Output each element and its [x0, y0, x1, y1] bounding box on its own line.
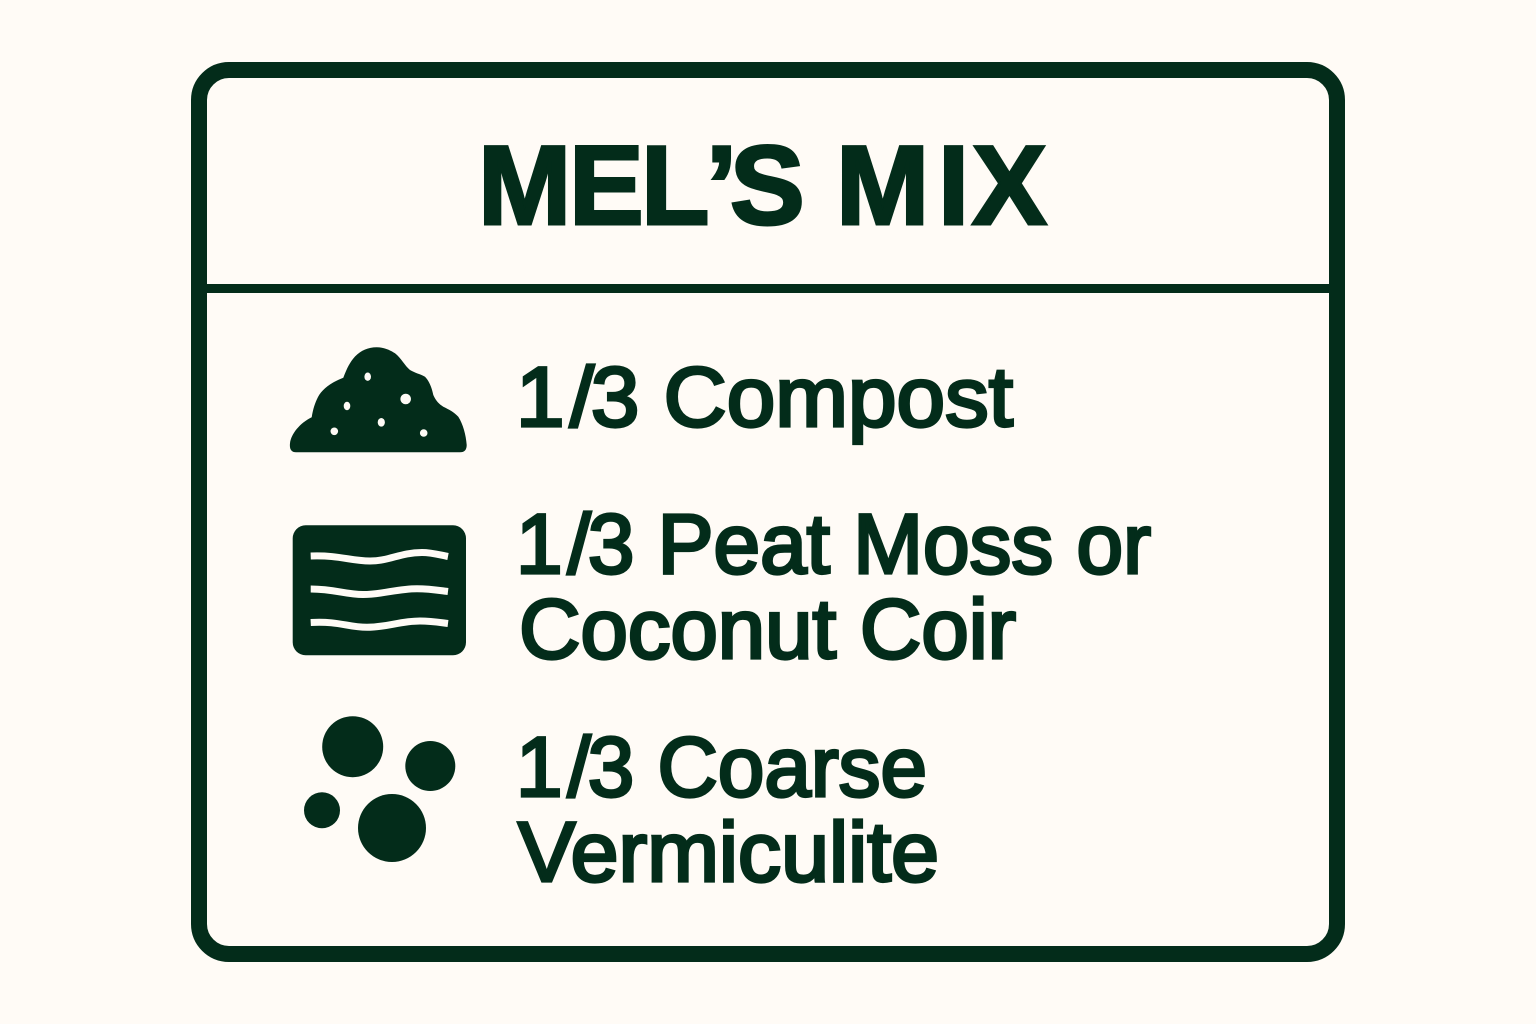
icon: vermiculite granules: [304, 716, 455, 862]
title: MEL’S MIX: [478, 123, 1047, 248]
text: coarse vermiculite: 1/3 Coarse: [516, 720, 927, 814]
text: coarse vermiculite: Vermiculite: [518, 805, 939, 899]
text: peat moss or coconut coir: [516, 497, 1151, 676]
text: peat moss or coconut coir: Coconut Coir: [519, 582, 1016, 676]
panel: outer frame: [199, 70, 1337, 954]
text: peat moss or coconut coir: 1/3 Peat Moss or: [516, 497, 1151, 591]
text: compost: 1/3 Compost: [516, 350, 1013, 444]
icon: compost pile: [290, 347, 467, 452]
text: coarse vermiculite: [516, 720, 939, 899]
icon: peat moss block: [293, 525, 466, 655]
